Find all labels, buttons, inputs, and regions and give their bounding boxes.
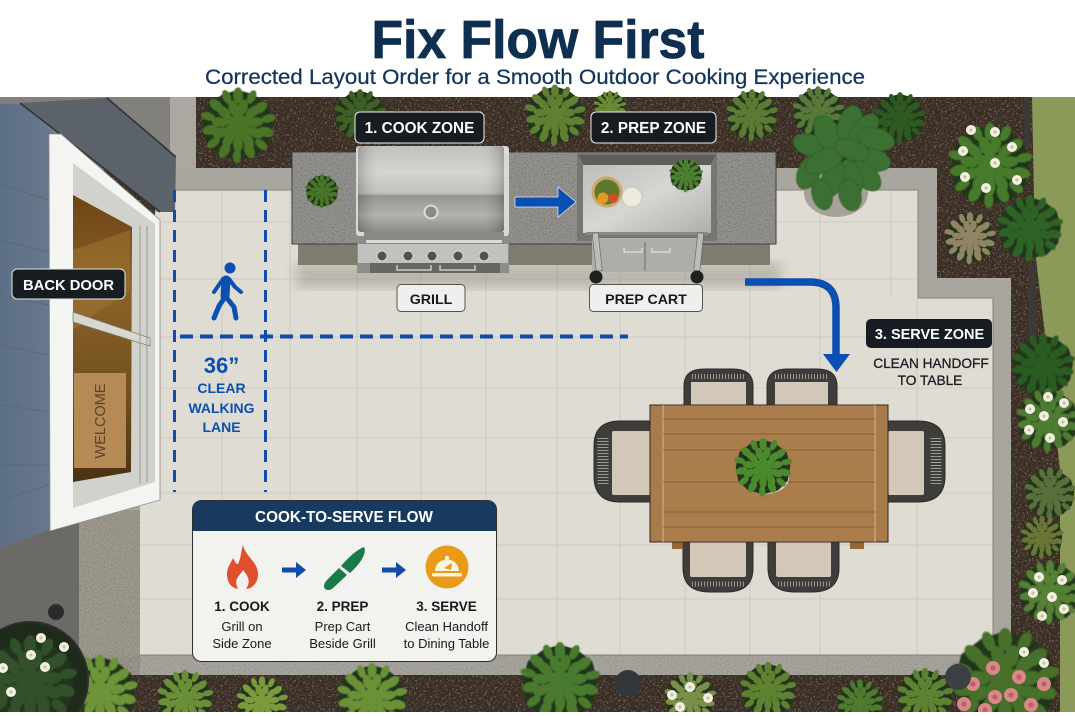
plants: right flower beds — [944, 123, 1075, 625]
icon: serving cloche — [426, 546, 468, 588]
gravel corner — [0, 97, 170, 170]
walking lane dashed lines — [174, 190, 628, 492]
step: serve: Clean Handoff — [405, 619, 488, 634]
mat text: WELCOME — [93, 383, 109, 458]
grill thermometer — [424, 206, 438, 218]
step: cook: Grill on — [221, 619, 263, 634]
arrow: prep to serve — [382, 562, 406, 578]
back door label — [12, 269, 125, 299]
step: prep: 2. PREP — [317, 599, 368, 614]
patio: coping border — [79, 168, 1011, 675]
icon: walking person — [214, 262, 241, 318]
lane width label: LANE — [202, 419, 241, 435]
sash bar — [73, 312, 150, 346]
chairs — [594, 369, 945, 592]
patio: pavers — [140, 190, 993, 655]
lane width label — [188, 353, 255, 435]
table — [650, 405, 888, 549]
planter: corner flower pot — [0, 622, 88, 716]
lane width label: 36” — [204, 353, 239, 378]
label: prep cart: PREP CART — [605, 292, 687, 308]
house wall — [0, 104, 62, 548]
icon: flame — [227, 545, 258, 589]
step: cook: 1. COOK — [214, 599, 270, 614]
step: prep — [309, 599, 376, 651]
label: grill: GRILL — [410, 292, 453, 308]
table centerpiece — [734, 438, 793, 497]
grill — [356, 146, 509, 273]
grill knobs — [377, 251, 489, 261]
step: cook: Side Zone — [212, 636, 272, 651]
serve zone note: TO TABLE — [898, 373, 962, 388]
plants: rear garden bed — [200, 84, 926, 164]
arrow: cook to prep — [282, 562, 306, 578]
step: serve: to Dining Table — [404, 636, 489, 651]
title: Fix Flow First — [372, 10, 705, 70]
step: serve — [404, 599, 489, 651]
lane width label: CLEAR — [197, 380, 246, 396]
step: serve: 3. SERVE — [416, 599, 477, 614]
label: serve zone — [866, 319, 992, 348]
chair cushions — [612, 382, 924, 577]
subtitle: Corrected Layout Order for a Smooth Outdoor Cooking Experience — [205, 65, 865, 89]
lawn — [1032, 97, 1075, 712]
panel header — [193, 501, 496, 531]
prep cart — [577, 153, 717, 284]
chair rope weave — [603, 376, 936, 584]
step: prep: Beside Grill — [309, 636, 376, 651]
large potted plant — [789, 103, 897, 217]
bowl of vegetables — [592, 176, 622, 208]
counter shadow — [296, 262, 781, 288]
label: cook zone: 1. COOK ZONE — [365, 120, 474, 137]
roof overhang — [20, 98, 176, 212]
zone arrow: grill to prep — [515, 187, 576, 217]
label: prep zone — [591, 112, 716, 143]
counter herb plant — [305, 174, 339, 208]
dining set — [594, 369, 945, 592]
garden lights — [48, 604, 971, 696]
panel header: COOK-TO-SERVE FLOW — [255, 509, 434, 526]
back door — [49, 134, 160, 531]
icon: knife — [324, 547, 365, 590]
label: prep zone: 2. PREP ZONE — [601, 120, 706, 137]
label: prep cart — [590, 284, 702, 312]
granite counter — [292, 152, 776, 265]
label: grill — [397, 284, 465, 312]
doormat — [74, 373, 126, 468]
plants: bottom bed — [62, 628, 1060, 716]
serve zone note — [873, 356, 989, 388]
label: serve zone: 3. SERVE ZONE — [875, 327, 984, 343]
bottom white strip — [0, 712, 1075, 716]
panel: cook-to-serve flow — [192, 500, 496, 662]
step: prep: Prep Cart — [315, 619, 371, 634]
step: cook — [212, 599, 272, 651]
serve zone note: CLEAN HANDOFF — [873, 356, 989, 371]
potted herb — [669, 158, 703, 193]
label: cook zone — [355, 112, 484, 143]
lane width label: WALKING — [188, 400, 255, 416]
small white bowl — [622, 187, 642, 207]
stone below door — [79, 510, 1011, 675]
curved arrow: prep to table — [745, 282, 850, 372]
back door label: BACK DOOR — [23, 277, 114, 294]
cart wheels — [590, 270, 602, 284]
